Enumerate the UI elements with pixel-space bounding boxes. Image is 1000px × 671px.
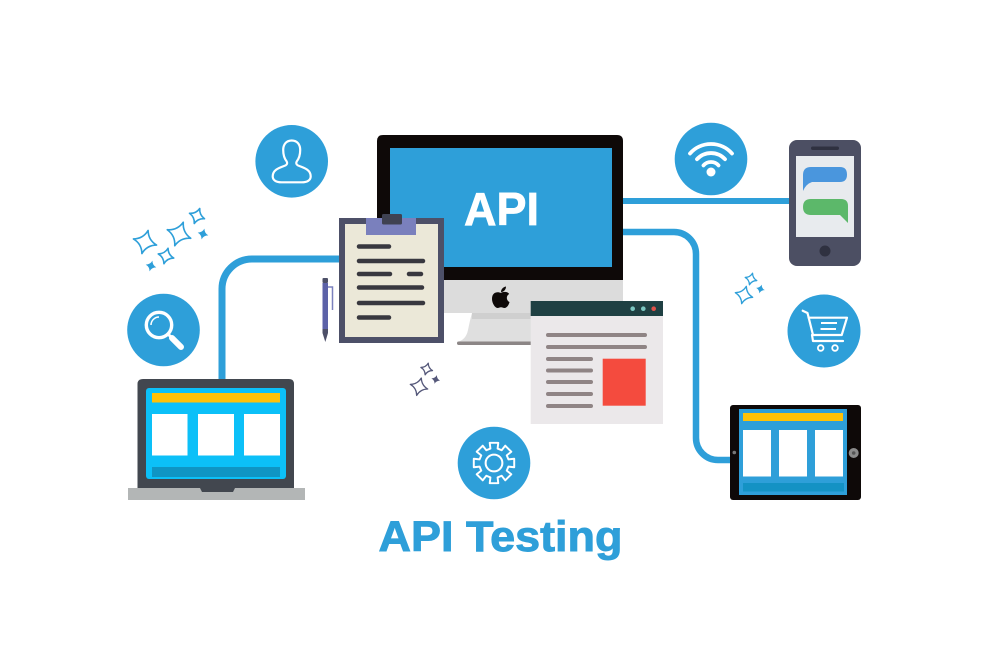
icon: wifi <box>675 123 747 195</box>
sparkles: right <box>733 272 766 306</box>
sparkles: centre <box>408 362 441 398</box>
smartphone <box>789 140 861 266</box>
browser window <box>531 301 663 424</box>
icon: shopping cart <box>788 294 860 368</box>
icon: gear <box>458 427 530 499</box>
clipboard <box>339 214 444 343</box>
connector: laptop to clipboard <box>222 259 342 380</box>
chat bubble: green <box>803 199 848 223</box>
connector: monitor to phone <box>622 198 791 204</box>
icon: magnifying glass <box>127 294 200 366</box>
icon: user <box>255 125 328 198</box>
desktop monitor <box>377 135 623 345</box>
monitor label: API: API <box>464 183 539 235</box>
chat bubble: blue <box>803 167 847 191</box>
title: API Testing <box>378 513 622 561</box>
icon: apple logo <box>492 286 510 308</box>
sparkles: upper left <box>130 206 210 273</box>
tablet <box>730 405 861 500</box>
laptop <box>128 379 305 500</box>
connector: monitor to tablet <box>622 232 732 460</box>
pen <box>322 278 332 342</box>
